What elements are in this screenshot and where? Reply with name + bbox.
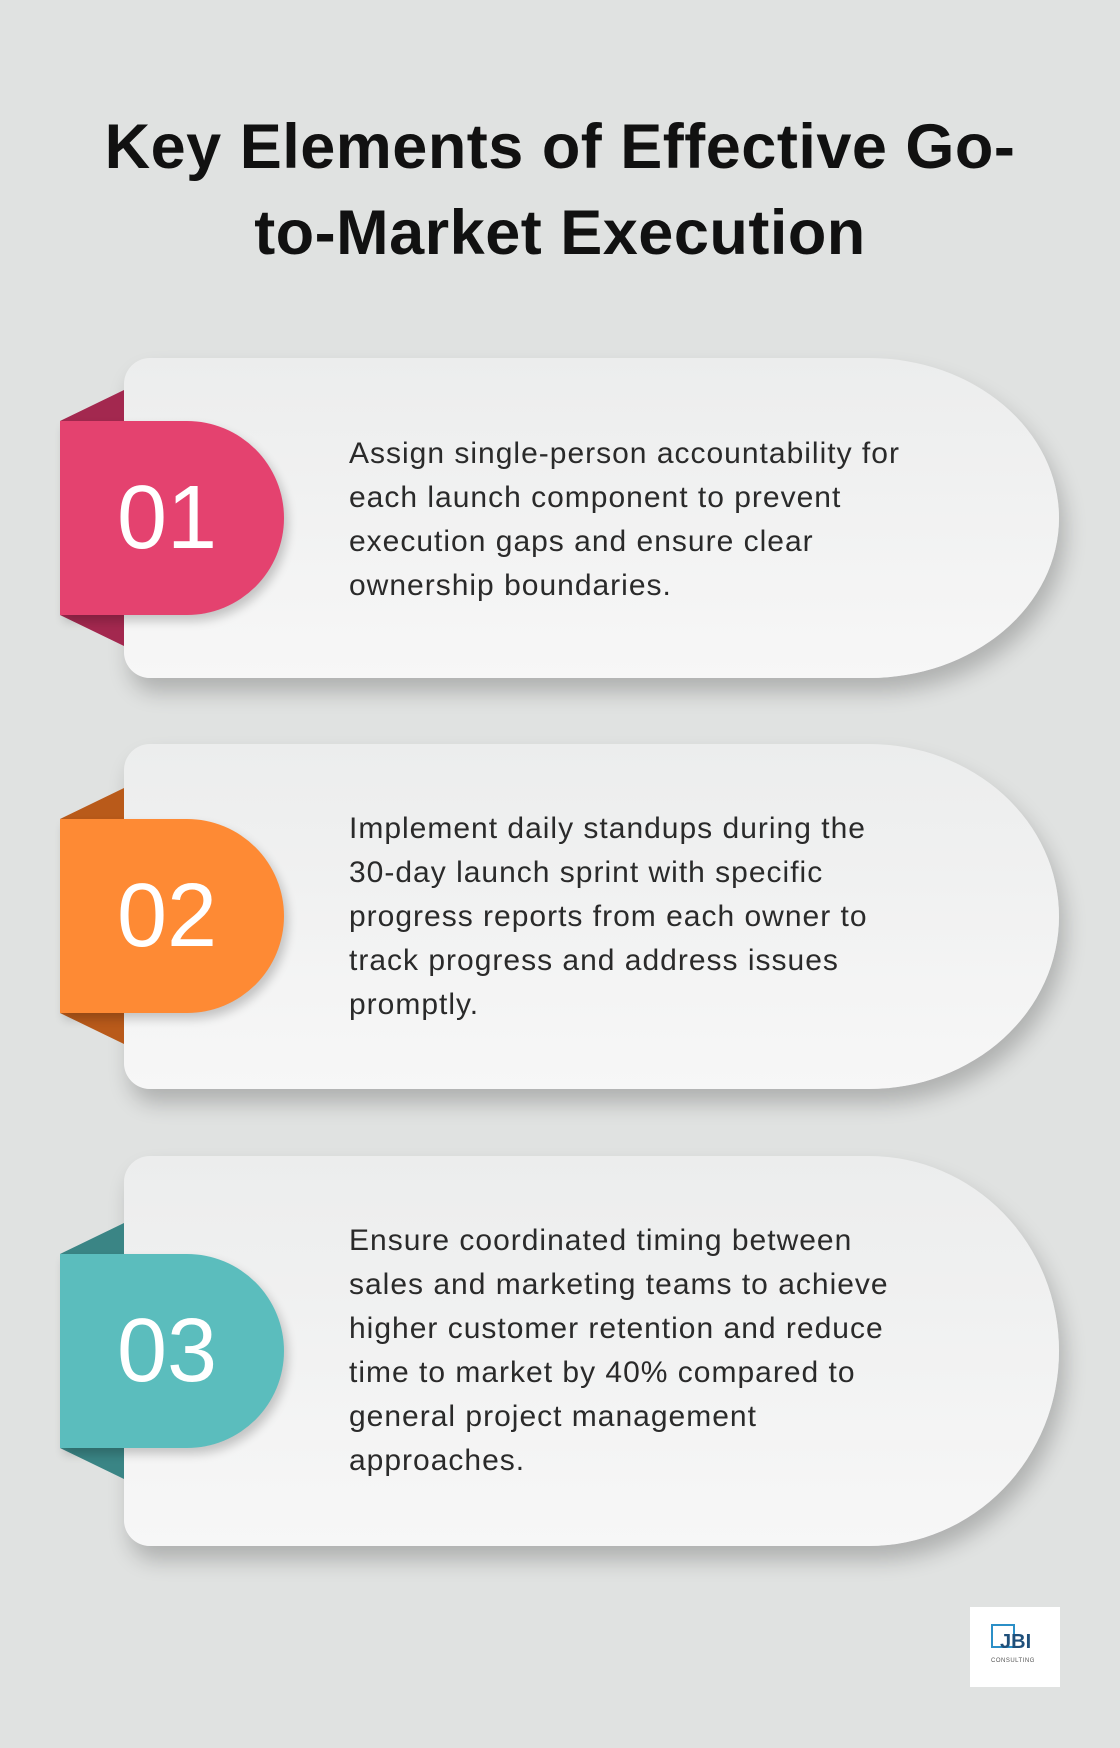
panel: step 1 [60,358,1074,702]
card 1: each launch component to prevent [349,481,841,514]
panel: step 2 [60,744,1074,1113]
badge 02: 02 [117,866,217,966]
badge 03 [60,1254,284,1448]
badge 03: 03 [117,1301,217,1401]
badge 01: 01 [117,468,217,568]
card 3: general project management [349,1400,757,1433]
badge 01 [60,421,284,615]
card 2: promptly. [349,988,479,1021]
badge 02 [60,819,284,1013]
logo [970,1607,1060,1687]
title [105,112,1015,268]
title: Key Elements of Effective Go- [105,112,1015,182]
card 2: 30-day launch sprint with specific [349,856,823,889]
card 1: execution gaps and ensure clear [349,525,814,558]
card 1: ownership boundaries. [349,569,672,602]
logo: JBI [1000,1631,1031,1653]
card 3: Ensure coordinated timing between [349,1224,852,1257]
logo: CONSULTING [991,1658,1035,1664]
panel: step 3 [60,1156,1074,1570]
card 2: progress reports from each owner to [349,900,868,933]
card 3: approaches. [349,1444,525,1477]
card 1: Assign single-person accountability for [349,437,900,470]
card 3 [124,1156,1059,1546]
card 1 [124,358,1059,678]
card 3: higher customer retention and reduce [349,1312,884,1345]
card 2 [124,744,1059,1089]
card 2: Implement daily standups during the [349,812,866,845]
card 3: time to market by 40% compared to [349,1356,856,1389]
title: to-Market Execution [254,198,866,268]
card 3: sales and marketing teams to achieve [349,1268,889,1301]
card 2: track progress and address issues [349,944,839,977]
